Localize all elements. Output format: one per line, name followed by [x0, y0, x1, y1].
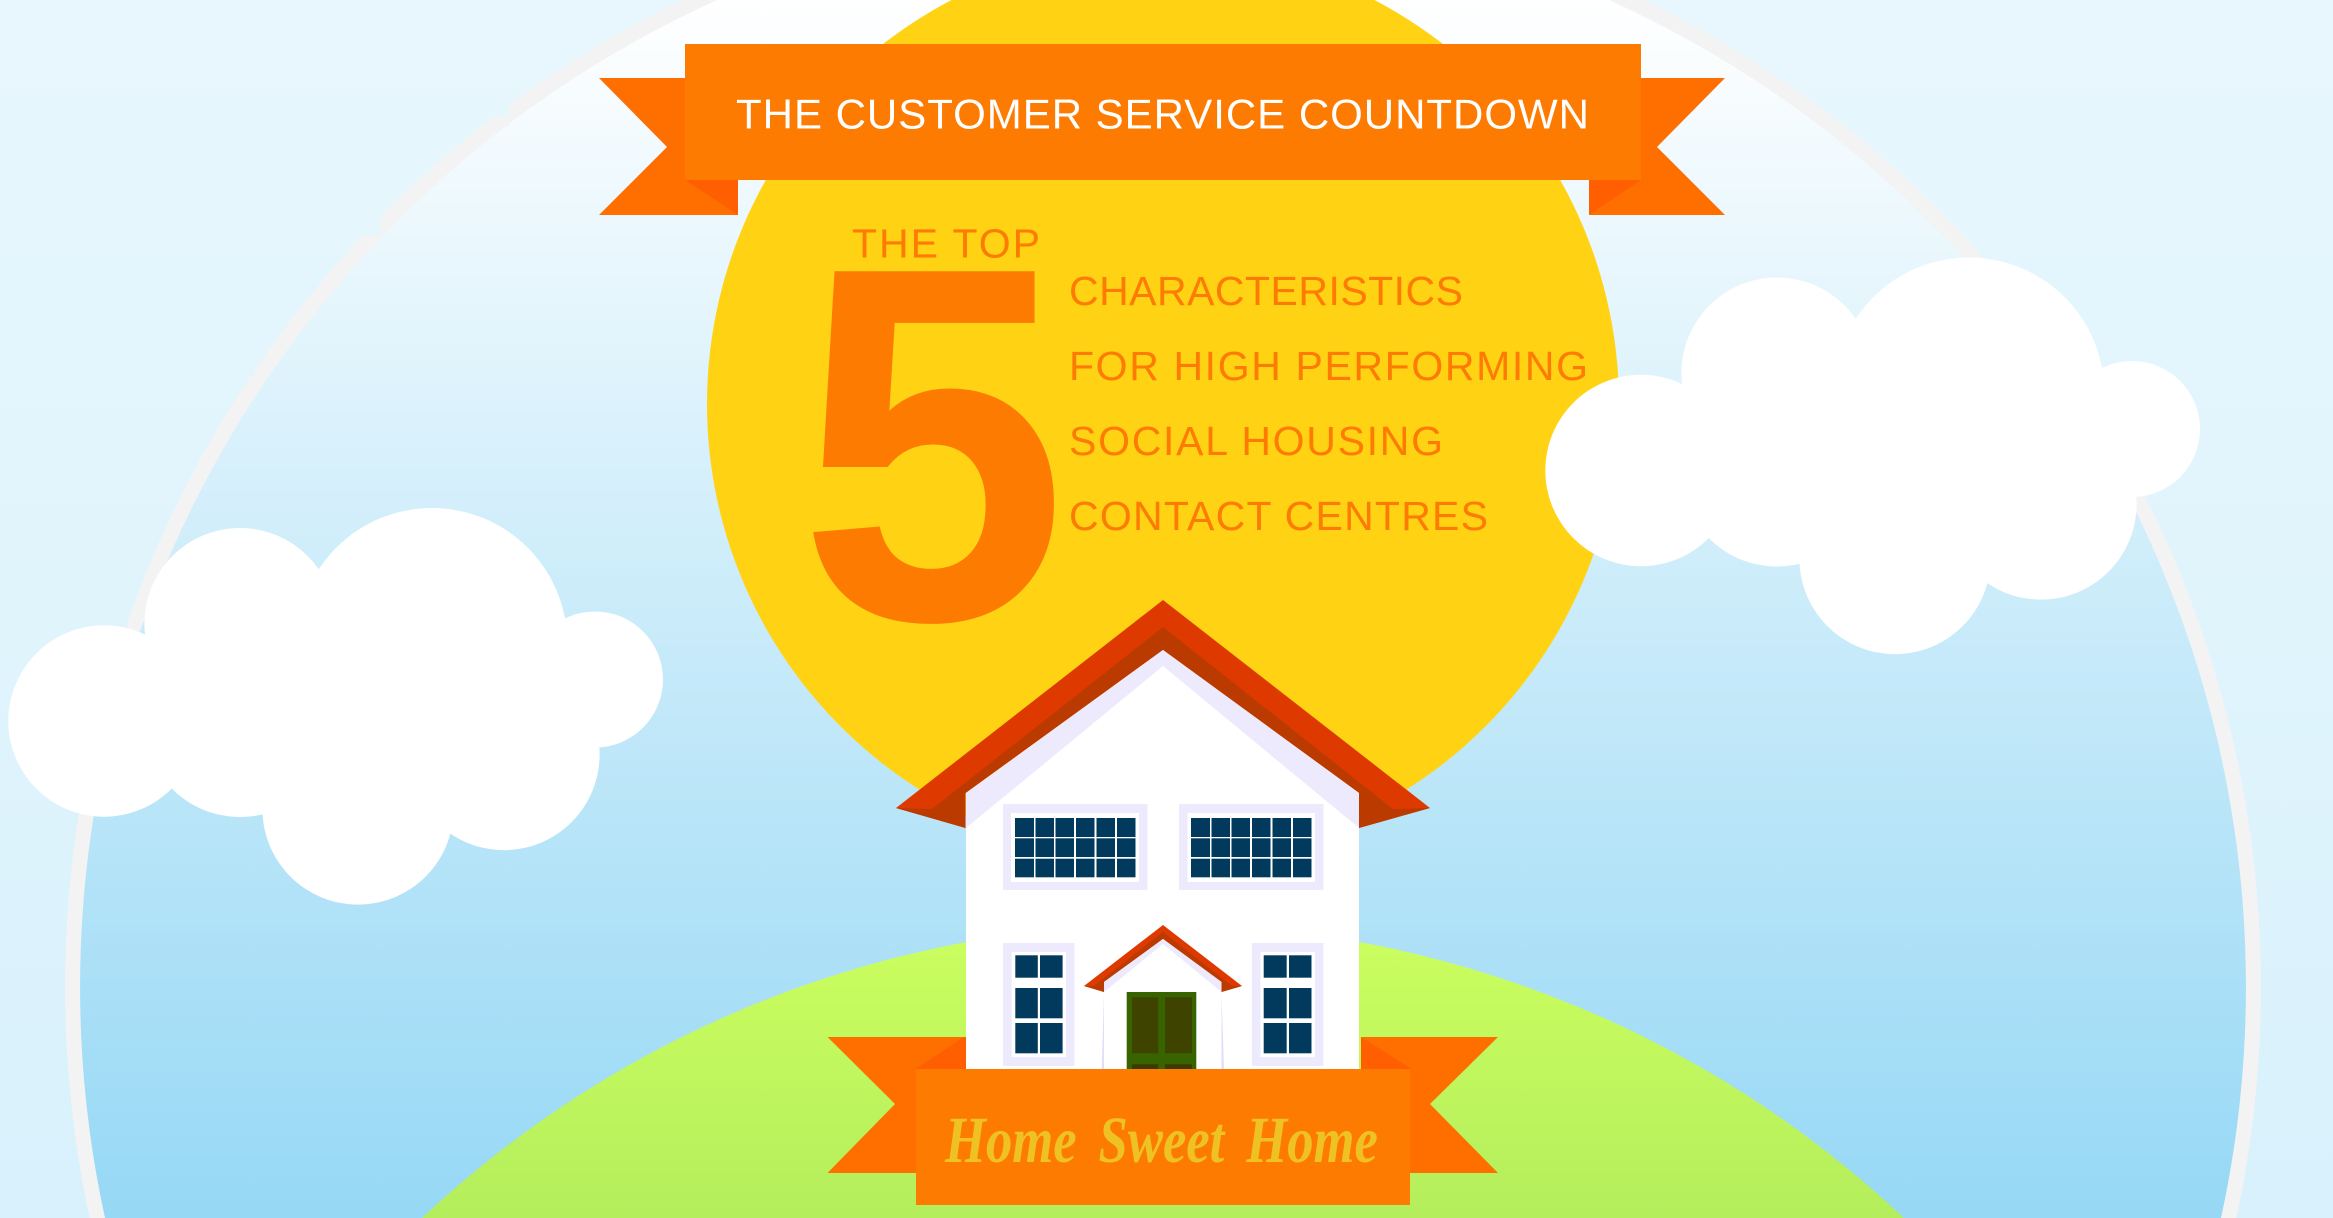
- big number 5: 5: [798, 161, 1067, 726]
- top ribbon banner: [599, 44, 1725, 215]
- cloud right: [1545, 258, 2200, 654]
- ribbon left fold: [915, 1037, 966, 1069]
- porch eaves trim: [1104, 939, 1222, 992]
- green hill: [422, 924, 1904, 1218]
- lower right window: [1252, 943, 1323, 1066]
- heading: the top 5: [798, 161, 1588, 726]
- line: contact centres: CONTACT CENTRES: [1069, 493, 1488, 539]
- porch right column edge: [1222, 992, 1224, 1069]
- ribbon right tail: [1589, 78, 1725, 215]
- house wall: [966, 650, 1359, 1069]
- sun: [707, 0, 1619, 860]
- upper left window: [1003, 804, 1148, 890]
- line: social housing: SOCIAL HOUSING: [1069, 418, 1443, 464]
- upper right window: [1179, 804, 1324, 890]
- line: characteristics: CHARACTERISTICS: [1069, 268, 1463, 314]
- porch wall: [1104, 939, 1222, 1069]
- title: THE CUSTOMER SERVICE COUNTDOWN: [736, 90, 1589, 138]
- roof: [896, 600, 1430, 828]
- porch roof: [1084, 925, 1242, 992]
- front door: [1127, 992, 1196, 1069]
- ribbon right fold: [1589, 180, 1641, 215]
- porch left column edge: [1102, 992, 1104, 1069]
- ribbon right tail: [1361, 1037, 1498, 1173]
- ribbon left tail: [599, 78, 738, 215]
- roof underside shadow: [896, 627, 1430, 828]
- ribbon left fold: [685, 180, 738, 215]
- ribbon text: home sweet home: Home Sweet Home: [944, 1103, 1378, 1176]
- bottom ribbon banner: [828, 1037, 1498, 1205]
- cloud left: [8, 508, 663, 905]
- lower left window: [1003, 943, 1074, 1066]
- eaves trim: [966, 650, 1359, 828]
- the top label: THE TOP: [852, 220, 1040, 266]
- ribbon main band: [916, 1069, 1410, 1205]
- ribbon left tail: [828, 1037, 966, 1173]
- ribbon right fold: [1361, 1037, 1412, 1069]
- line: for high performing: FOR HIGH PERFORMING: [1069, 343, 1588, 389]
- porch: [1084, 925, 1242, 1069]
- ribbon main band: [685, 44, 1641, 180]
- house: [896, 600, 1430, 1069]
- porch roof shadow: [1084, 932, 1242, 992]
